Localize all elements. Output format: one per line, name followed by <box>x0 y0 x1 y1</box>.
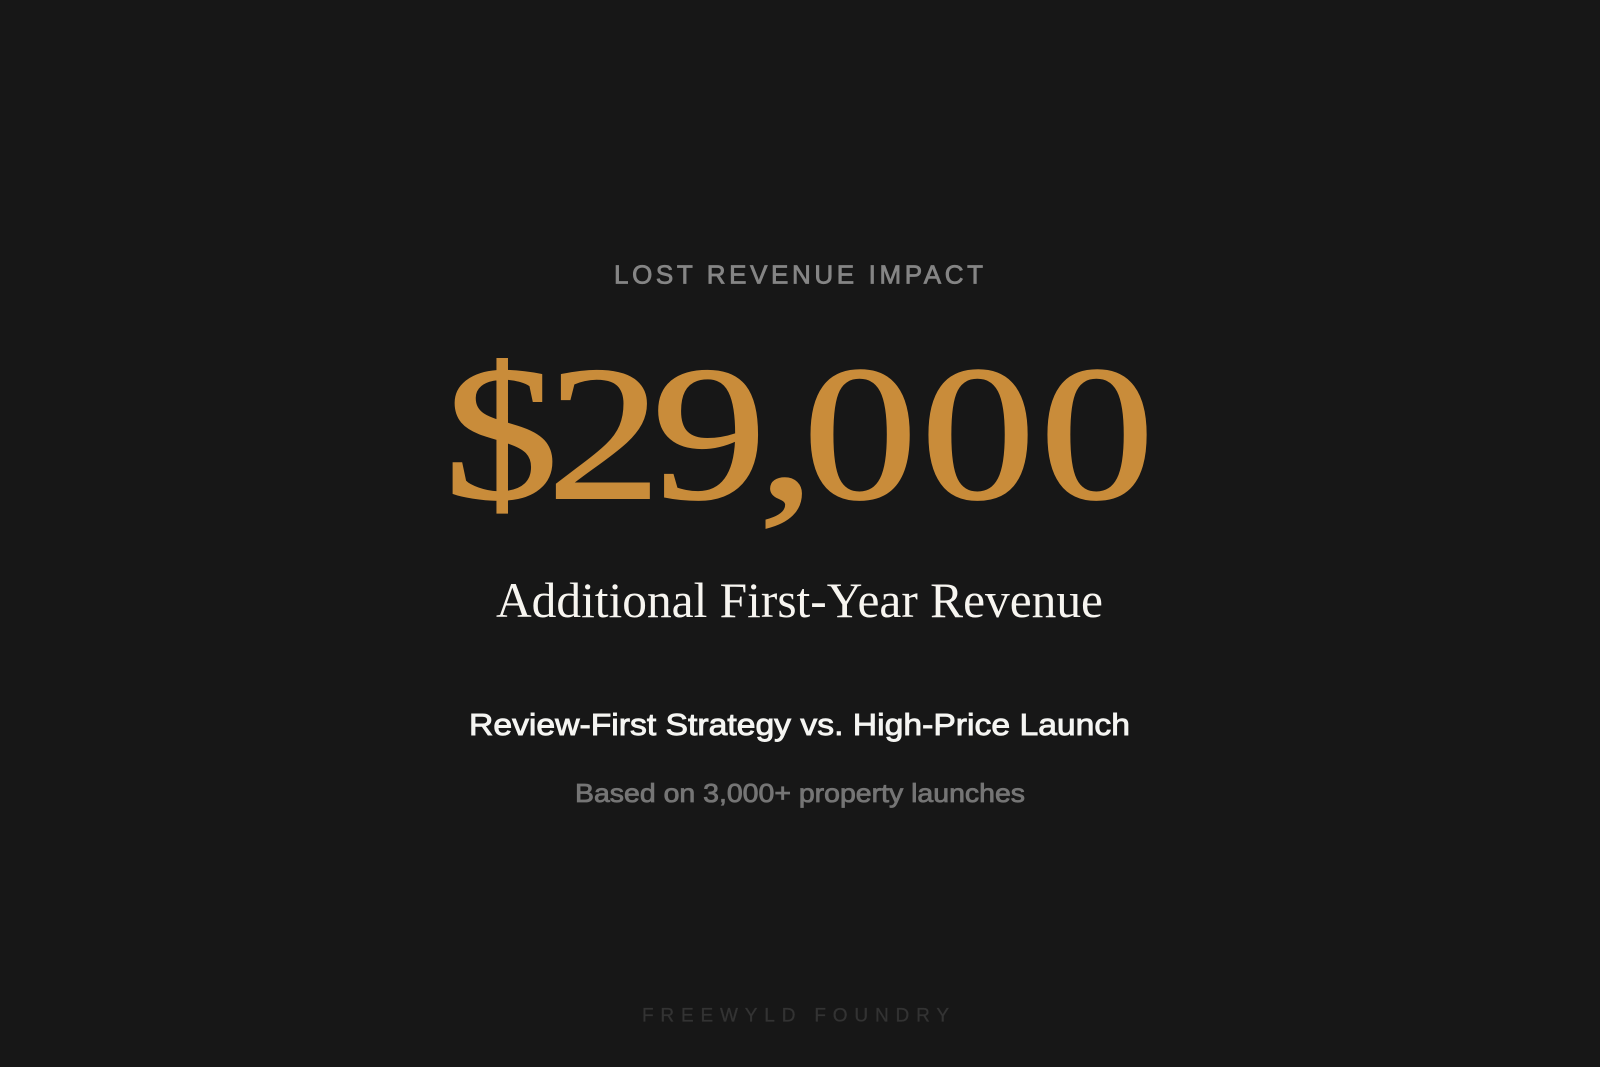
data source note: Based on 3,000+ property launches <box>575 778 1025 808</box>
comparison statement: Review-First Strategy vs. High-Price Launch <box>469 707 1130 742</box>
footer brand: FREEWYLD FOUNDRY <box>642 1006 949 1026</box>
big number: $29,000 <box>444 327 1154 540</box>
eyebrow heading: LOST REVENUE IMPACT <box>614 260 983 290</box>
subtitle: Additional First-Year Revenue <box>496 572 1103 628</box>
